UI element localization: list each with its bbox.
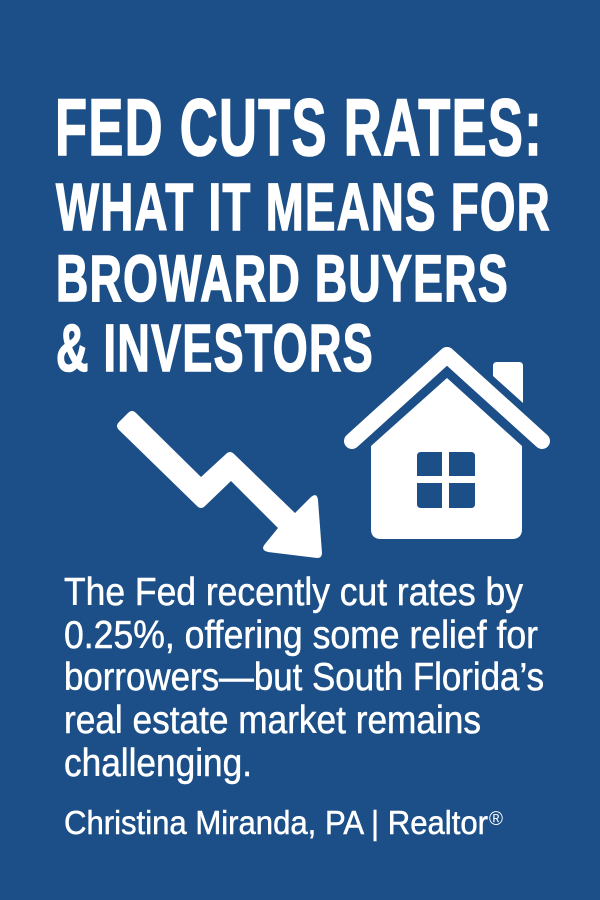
title [55,83,551,386]
icon: falling arrow [117,411,322,558]
title: & INVESTORS [56,311,374,386]
body text: real estate market remains [64,699,481,742]
body text: borrowers—but South Florida’s [64,656,544,699]
author credit: Christina Miranda, PA | Realtor [64,804,488,841]
body text: The Fed recently cut rates by [64,571,523,614]
window [417,452,475,508]
body text [64,571,544,785]
body text: challenging. [64,742,252,785]
body text: 0.25%, offering some relief for [64,614,538,657]
icon: house [352,355,542,539]
author credit: ® [489,809,503,830]
